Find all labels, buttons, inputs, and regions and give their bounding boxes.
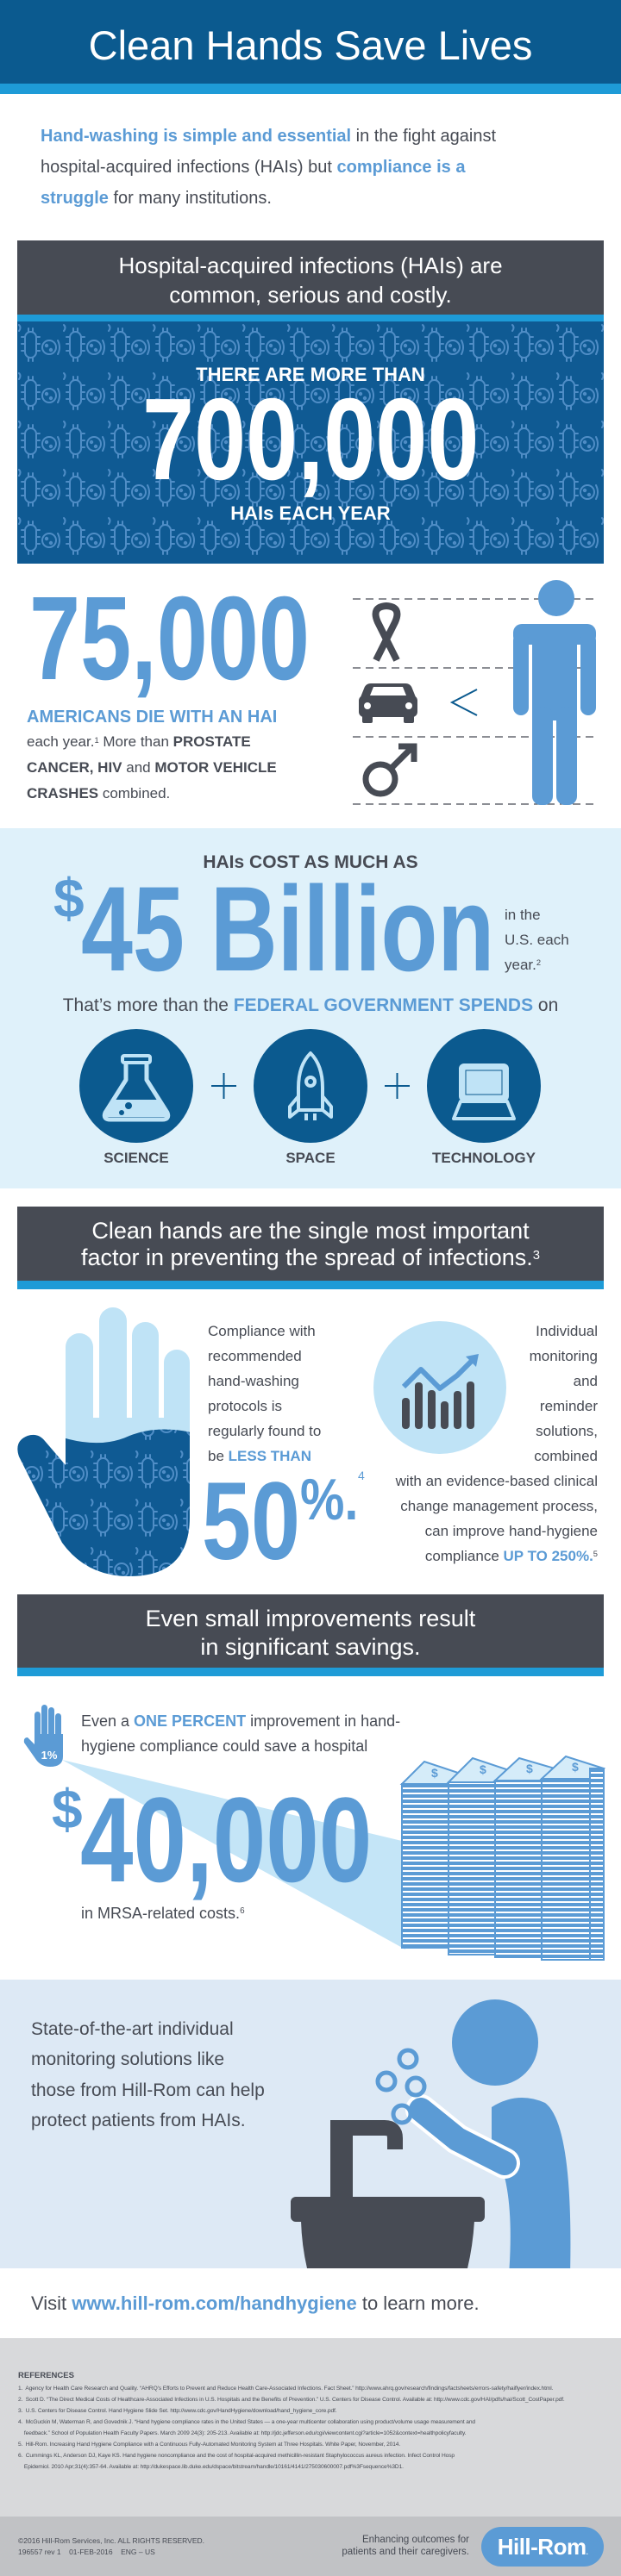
heading text: Even small improvements result [146,1606,475,1631]
heading text: common, serious and costly. [169,282,452,308]
text: in the U.S. each year: in the [505,907,541,923]
text: compliance less than: protocols is [208,1398,282,1414]
plus sign [211,1073,236,1099]
label: technology: TECHNOLOGY [432,1150,536,1166]
icon: technology laptop [427,1029,541,1143]
text: in the U.S. each year: U.S. each [505,932,569,948]
tagline [342,2535,469,2557]
panel: savings heading [17,1594,604,1676]
big number 50%: 50 [202,1460,300,1583]
text: compliance less than: regularly found to [208,1423,321,1439]
icon: small hand 1%: 1% [41,1749,58,1762]
references list: feedback.” School of Population Health Faculty Papers. March 2009 24(3): 205-213. Available at: http://jdc.jefferson.edu/cgi/viewcontent.cgi?article=1052&context=healthpolicyfaculty. [24,2430,466,2436]
icon: money stacks: $ [572,1760,579,1774]
icon: person washing hands at sink [291,1999,571,2268]
heading text [118,253,503,308]
text: monitoring solutions: combined [534,1448,598,1464]
big number 50%: 4 [358,1469,365,1482]
text: monitoring solutions: compliance UP TO 250%.5 [425,1548,598,1564]
references list: 1. Agency for Health Care Research and Quality. “AHRQ’s Efforts to Prevent and Reduce Health Care-Associated Infections. Fact Sheet.” http://www.ahrq.gov/research/findings/factsheets/errors-safety/haiflyer/index.html. [18,2386,553,2392]
text: federal government spends: That’s more than the FEDERAL GOVERNMENT SPENDS on [63,995,558,1015]
text: in the U.S. each year [505,907,569,973]
text: monitoring solutions: with an evidence-based clinical [396,1473,598,1489]
footer [0,2517,621,2576]
plus sign [385,1073,410,1099]
references heading: REFERENCES [18,2371,74,2380]
panel: HAIs common heading [17,240,604,321]
text: monitoring solutions: solutions, [536,1423,598,1439]
label: science: SCIENCE [104,1150,169,1166]
intro text: hospital-acquired infections (HAIs) but compliance is a [41,158,465,177]
icon: chart circle [373,1321,506,1454]
logo: Hill-Rom: Hill-Rom. [498,2534,587,2560]
references list: 4. McGuckin M, Waterman R, and Govednik J. “Hand hygiene compliance rates in the United States — a one-year multicenter collaboration using product/volume usage measurement and [18,2419,475,2425]
big number 50% [202,1460,365,1583]
text: state of the art: those from Hill-Rom can help [31,2080,265,2100]
icon: science flask [79,1029,193,1143]
big number $40,000: $ [52,1778,83,1840]
references list [18,2386,565,2470]
text: state of the art: monitoring solutions like [31,2049,224,2069]
beam from hand to money [62,1760,405,1949]
tagline: patients and their caregivers. [342,2547,469,2557]
icon: male symbol [366,746,414,794]
text: comparison body: CRASHES combined. [27,785,170,801]
text: monitoring solutions: change management process, [400,1498,598,1514]
heading text: in significant savings. [200,1634,421,1660]
intro text: struggle for many institutions. [41,189,272,208]
icon: hand with germs [17,1307,190,1576]
person [421,1999,570,2275]
text: MRSA costs: in MRSA-related costs.6 [81,1905,245,1922]
copyright text [18,2536,204,2556]
icon: small hand 1% [24,1705,63,1767]
text: one percent improvement: hygiene compliance could save a hospital [81,1737,367,1755]
icon: person figure [513,580,596,805]
sink [291,2120,485,2275]
text: monitoring solutions: monitoring [530,1348,598,1364]
text: compliance less than: hand-washing [208,1373,299,1389]
heading text: Hospital-acquired infections (HAIs) are [118,253,503,278]
arrow: less than [452,689,477,715]
text: compliance less than: recommended [208,1348,302,1364]
title: Clean Hands Save Lives [89,22,532,68]
text: monitoring solutions: can improve hand-hygiene [425,1523,598,1539]
text: compliance less than [208,1323,321,1464]
logo: Hill-Rom [481,2527,604,2567]
text: visit website: Visit www.hill-rom.com/handhygiene to learn more. [31,2292,480,2314]
bubbles [378,2050,424,2123]
icon: money stacks: $ [480,1762,486,1776]
heading text [146,1606,476,1660]
copyright text: ©2016 Hill-Rom Services, Inc. ALL RIGHTS RESERVED. [18,2536,204,2545]
icons: science + space + technology [79,1029,541,1143]
text: compliance less than: be LESS THAN [208,1448,311,1464]
icon: money stacks: $ [431,1766,438,1780]
panel: references [0,2338,621,2517]
heading text: factor in preventing the spread of infections.3 [81,1244,540,1270]
intro text [41,127,496,208]
references list: 6. Cummings KL, Anderson DJ, Kaye KS. Hand hygiene noncompliance and the cost of hospital-acquired methicillin-resistant Staphylococcus aureus infection. Infect Control Hosp [18,2453,455,2459]
text: monitoring solutions [395,1323,598,1564]
references list: Epidemiol. 2010 Apr;31(4):357-64. Available at: http://dukespace.lib.duke.edu/dspace/bitstream/handle/10161/4141/275030600007.pdf%3Fsequence%3D1. [24,2464,404,2470]
references list: 3. U.S. Centers for Disease Control. Hand Hygiene Slide Set. http://www.cdc.gov/HandHygiene/download/hand_hygiene_core.pdf. [18,2408,337,2414]
text: compliance less than: Compliance with [208,1323,316,1339]
heading text [81,1218,540,1270]
text: HAIs cost as much as: HAIs COST AS MUCH AS [203,852,418,872]
big number 75,000: 75,000 [29,572,310,705]
text: monitoring solutions: reminder [540,1398,598,1414]
icon: space rocket [254,1029,367,1143]
panel: cost section [0,828,621,1188]
text: monitoring solutions: Individual [536,1323,598,1339]
heading text: Clean hands are the single most important [91,1218,530,1244]
text: one percent improvement: Even a ONE PERCENT improvement in hand- [81,1712,400,1730]
intro text: Hand-washing is simple and essential in the fight against [41,127,496,146]
text: HAIs each year: HAIs EACH YEAR [230,502,391,524]
icon: car [359,683,417,723]
text: state of the art: State-of-the-art individual [31,2019,234,2039]
tagline: Enhancing outcomes for [362,2535,469,2545]
comparison graphic [353,580,596,805]
text: comparison body: CANCER, HIV and MOTOR VEHICLE [27,759,277,776]
icon: money stacks [400,1755,605,1961]
panel: monitoring solutions [0,1980,621,2268]
big number $45 Billion: $ [53,867,85,929]
text: comparison body: each year.1 More than PROSTATE [27,733,251,750]
references list: 5. Hill-Rom. Increasing Hand Hygiene Compliance with a Continuous Fully-Automated Monitoring System at Three Hospitals. White Paper, November, 2014. [18,2442,400,2448]
big number $40,000: 40,000 [80,1772,372,1907]
panel: 700,000 HAIs with germ pattern [17,321,604,564]
references list: 2. Scott D. “The Direct Medical Costs of Healthcare-Associated Infections in U.S. Hospitals and the Benefits of Prevention.” U.S. Centers for Disease Control. Available at: http://www.cdc.gov/HAI/pdfs/hai/Scott_CostPaper.pdf. [18,2397,565,2403]
text: state of the art: protect patients from HAIs. [31,2111,246,2130]
text: monitoring solutions: and [574,1373,598,1389]
panel: clean hands heading [17,1207,604,1289]
icon: money stacks: $ [526,1762,533,1775]
header banner [0,0,621,94]
text: state of the art [31,2019,265,2130]
label: space: SPACE [285,1150,336,1166]
text: comparison body [27,733,277,801]
big number 50%: %. [300,1467,358,1532]
text: in the U.S. each year: year.2 [505,957,541,973]
icon: ribbon [376,606,397,660]
text: there are more than: THERE ARE MORE THAN [196,364,425,385]
big number $45 Billion: 45 Billion [81,861,494,996]
text: Americans die: AMERICANS DIE WITH AN HAI [27,708,277,727]
text: one percent improvement [81,1712,400,1755]
big number 700,000: 700,000 [142,374,479,504]
copyright text: 196557 rev 1 01-FEB-2016 ENG – US [18,2548,155,2556]
